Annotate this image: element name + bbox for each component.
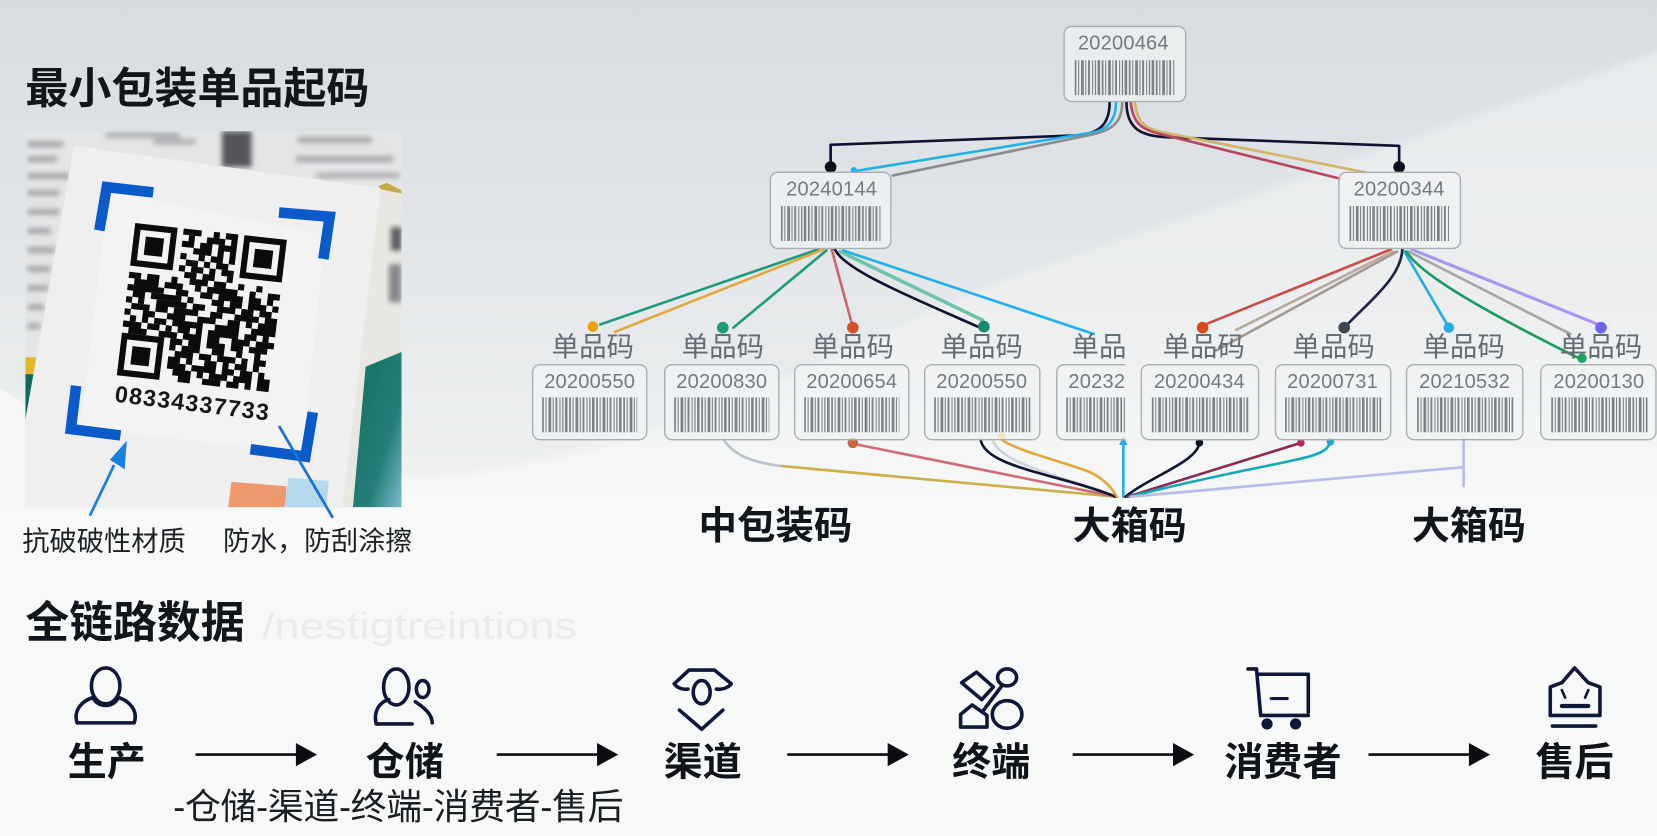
unit code 9 [1541,331,1656,440]
unit code 6: 20200434 [1154,371,1245,393]
unit code 9: 单品码 [1560,331,1642,362]
flow labels: 生产 [68,742,146,785]
flow labels [68,742,1614,785]
unit code 1: 单品码 [552,331,634,362]
unit code 5 (cut off): 单品码 [1072,331,1154,362]
unit code 7: 20200731 [1287,371,1378,393]
ghost subtitle: /nestigtreintions [262,605,577,646]
blurred background text [27,131,399,329]
tree connectors: middle right fan [1208,249,1596,357]
label: waterproof and scratch resistant: 防水，防刮涂擦 [223,527,412,557]
tree connectors: bottom convergence [724,438,1464,497]
middle barcode label right [1339,172,1460,248]
connector dots [588,161,1607,448]
blue scan corners [71,187,330,457]
flow labels: 消费者 [1224,742,1342,785]
side print blur [389,227,402,302]
callout arrow: tear-resistant [90,441,127,516]
unit code 4: 20200550 [936,371,1027,393]
QR digits: 08334337733 [114,381,272,426]
unit code 6 [1141,331,1259,440]
flow labels: 仓储 [366,742,444,785]
icon: production person [76,668,135,723]
group label: case code right: 大箱码 [1412,506,1526,548]
icon: after-sales house [1550,668,1600,726]
middle barcode label left [770,172,891,248]
edge strip [25,357,36,374]
unit code 4: 单品码 [941,331,1023,362]
unit code 7 [1276,331,1391,440]
unit code 1: 20200550 [544,371,635,393]
callout line: waterproof [279,426,333,518]
root barcode label: 20200464 [1078,33,1169,55]
print patches [228,482,286,507]
unit code 8: 20210532 [1419,371,1510,393]
flow labels: 渠道 [664,742,742,785]
tree connectors: middle left fan [600,249,1094,334]
unit code 2: 单品码 [682,331,764,362]
middle barcode label left: 20240144 [786,179,877,201]
unit code 8: 单品码 [1422,331,1505,362]
unit code 1 [533,331,647,440]
unit code 8 [1407,331,1523,440]
flow arrows [196,743,1490,766]
box front face [25,146,380,507]
icon: channel diamond [674,670,731,729]
flow labels: 终端 [952,742,1030,785]
label sticker [80,191,325,454]
flow labels: 售后 [1535,742,1614,785]
unit code 3 [795,331,909,440]
unit code 4 [925,331,1040,440]
title: smallest package: 最小包装单品起码 [25,66,369,114]
unit code 5 (cut off) [1056,333,1126,440]
unit code 2: 20200830 [676,371,767,393]
label: tear resistant material: 抗破破性材质 [22,526,186,557]
unit code 2 [665,331,779,440]
QR code [117,226,287,389]
unit code 6: 单品码 [1162,331,1245,362]
unit code 5 (cut off): 20232 [1068,371,1125,393]
bottom chain text: -仓储-渠道-终端-消费者-售后 [173,786,623,827]
unit code 3: 单品码 [812,331,894,362]
middle barcode label right: 20200344 [1354,179,1445,201]
unit code 3: 20200654 [806,371,897,393]
icon: terminal tools [961,669,1022,728]
tree connectors: root to middle [831,103,1399,179]
heading: full chain data: 全链路数据 [25,598,245,647]
group label: middle package code: 中包装码 [699,505,852,548]
group label: case code centre: 大箱码 [1073,506,1187,548]
unit code 9: 20200130 [1553,371,1644,393]
photo: QR code on package [25,131,402,507]
root barcode label [1064,26,1186,102]
unit code 7: 单品码 [1292,331,1375,362]
icon: warehouse people [375,669,432,724]
box right side [336,186,402,507]
icon: consumer cart [1248,669,1308,728]
